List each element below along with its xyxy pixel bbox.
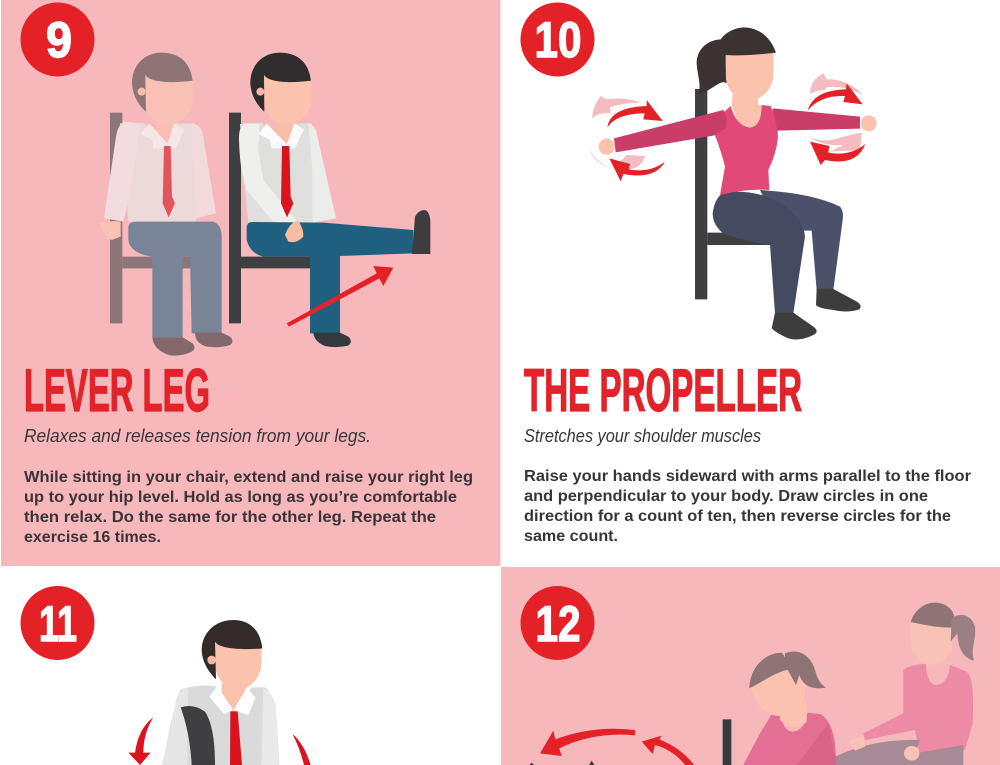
illustration: woman twisting in chair (723, 651, 837, 765)
instructions text (524, 468, 971, 545)
instructions text: up to your hip level. Hold as long as you’re comfortable (24, 489, 457, 506)
number badge 9 (20, 2, 94, 76)
number badge 11: 11 (39, 596, 77, 652)
panel: exercise 10 the propeller (501, 0, 1000, 566)
number badge 9: 9 (46, 12, 72, 68)
icon: rotation arrows right hand (807, 73, 865, 165)
instructions text (24, 469, 473, 546)
instructions text: direction for a count of ten, then reverse circles for the (524, 508, 951, 525)
instructions text: and perpendicular to your body. Draw circles in one (524, 488, 928, 505)
panel: exercise 11 (0, 567, 500, 765)
subtitle: benefit: Stretches your shoulder muscles (524, 426, 761, 446)
number badge 11 (20, 586, 94, 660)
number badge 10 (520, 2, 594, 76)
panel: exercise 12 (501, 567, 1000, 765)
number badge 12 (520, 586, 594, 660)
instructions text: Raise your hands sideward with arms parallel to the floor (524, 468, 971, 485)
instructions text: exercise 16 times. (24, 529, 161, 546)
instructions text: then relax. Do the same for the other leg. Repeat the (24, 509, 436, 526)
instructions text: same count. (524, 528, 618, 545)
icon: red turning arrows (128, 717, 311, 765)
illustration: woman with arms out (599, 27, 877, 339)
subtitle: benefit: Relaxes and releases tension from your legs. (24, 426, 371, 446)
title: lever leg: LEVER LEG (24, 357, 210, 424)
panel: exercise 9 lever leg (1, 0, 500, 566)
illustration: man raising right leg (229, 53, 430, 347)
number badge 10: 10 (534, 12, 582, 68)
icon: rotation arrows left hand (590, 96, 665, 181)
illustration: man twisting in chair (162, 620, 279, 765)
icon: red sweeping arrows (529, 729, 694, 765)
illustration: faded woman seated (835, 603, 975, 765)
instructions text: While sitting in your chair, extend and raise your right leg (24, 469, 473, 486)
illustration: faded man seated (100, 53, 232, 356)
number badge 12: 12 (536, 596, 580, 652)
